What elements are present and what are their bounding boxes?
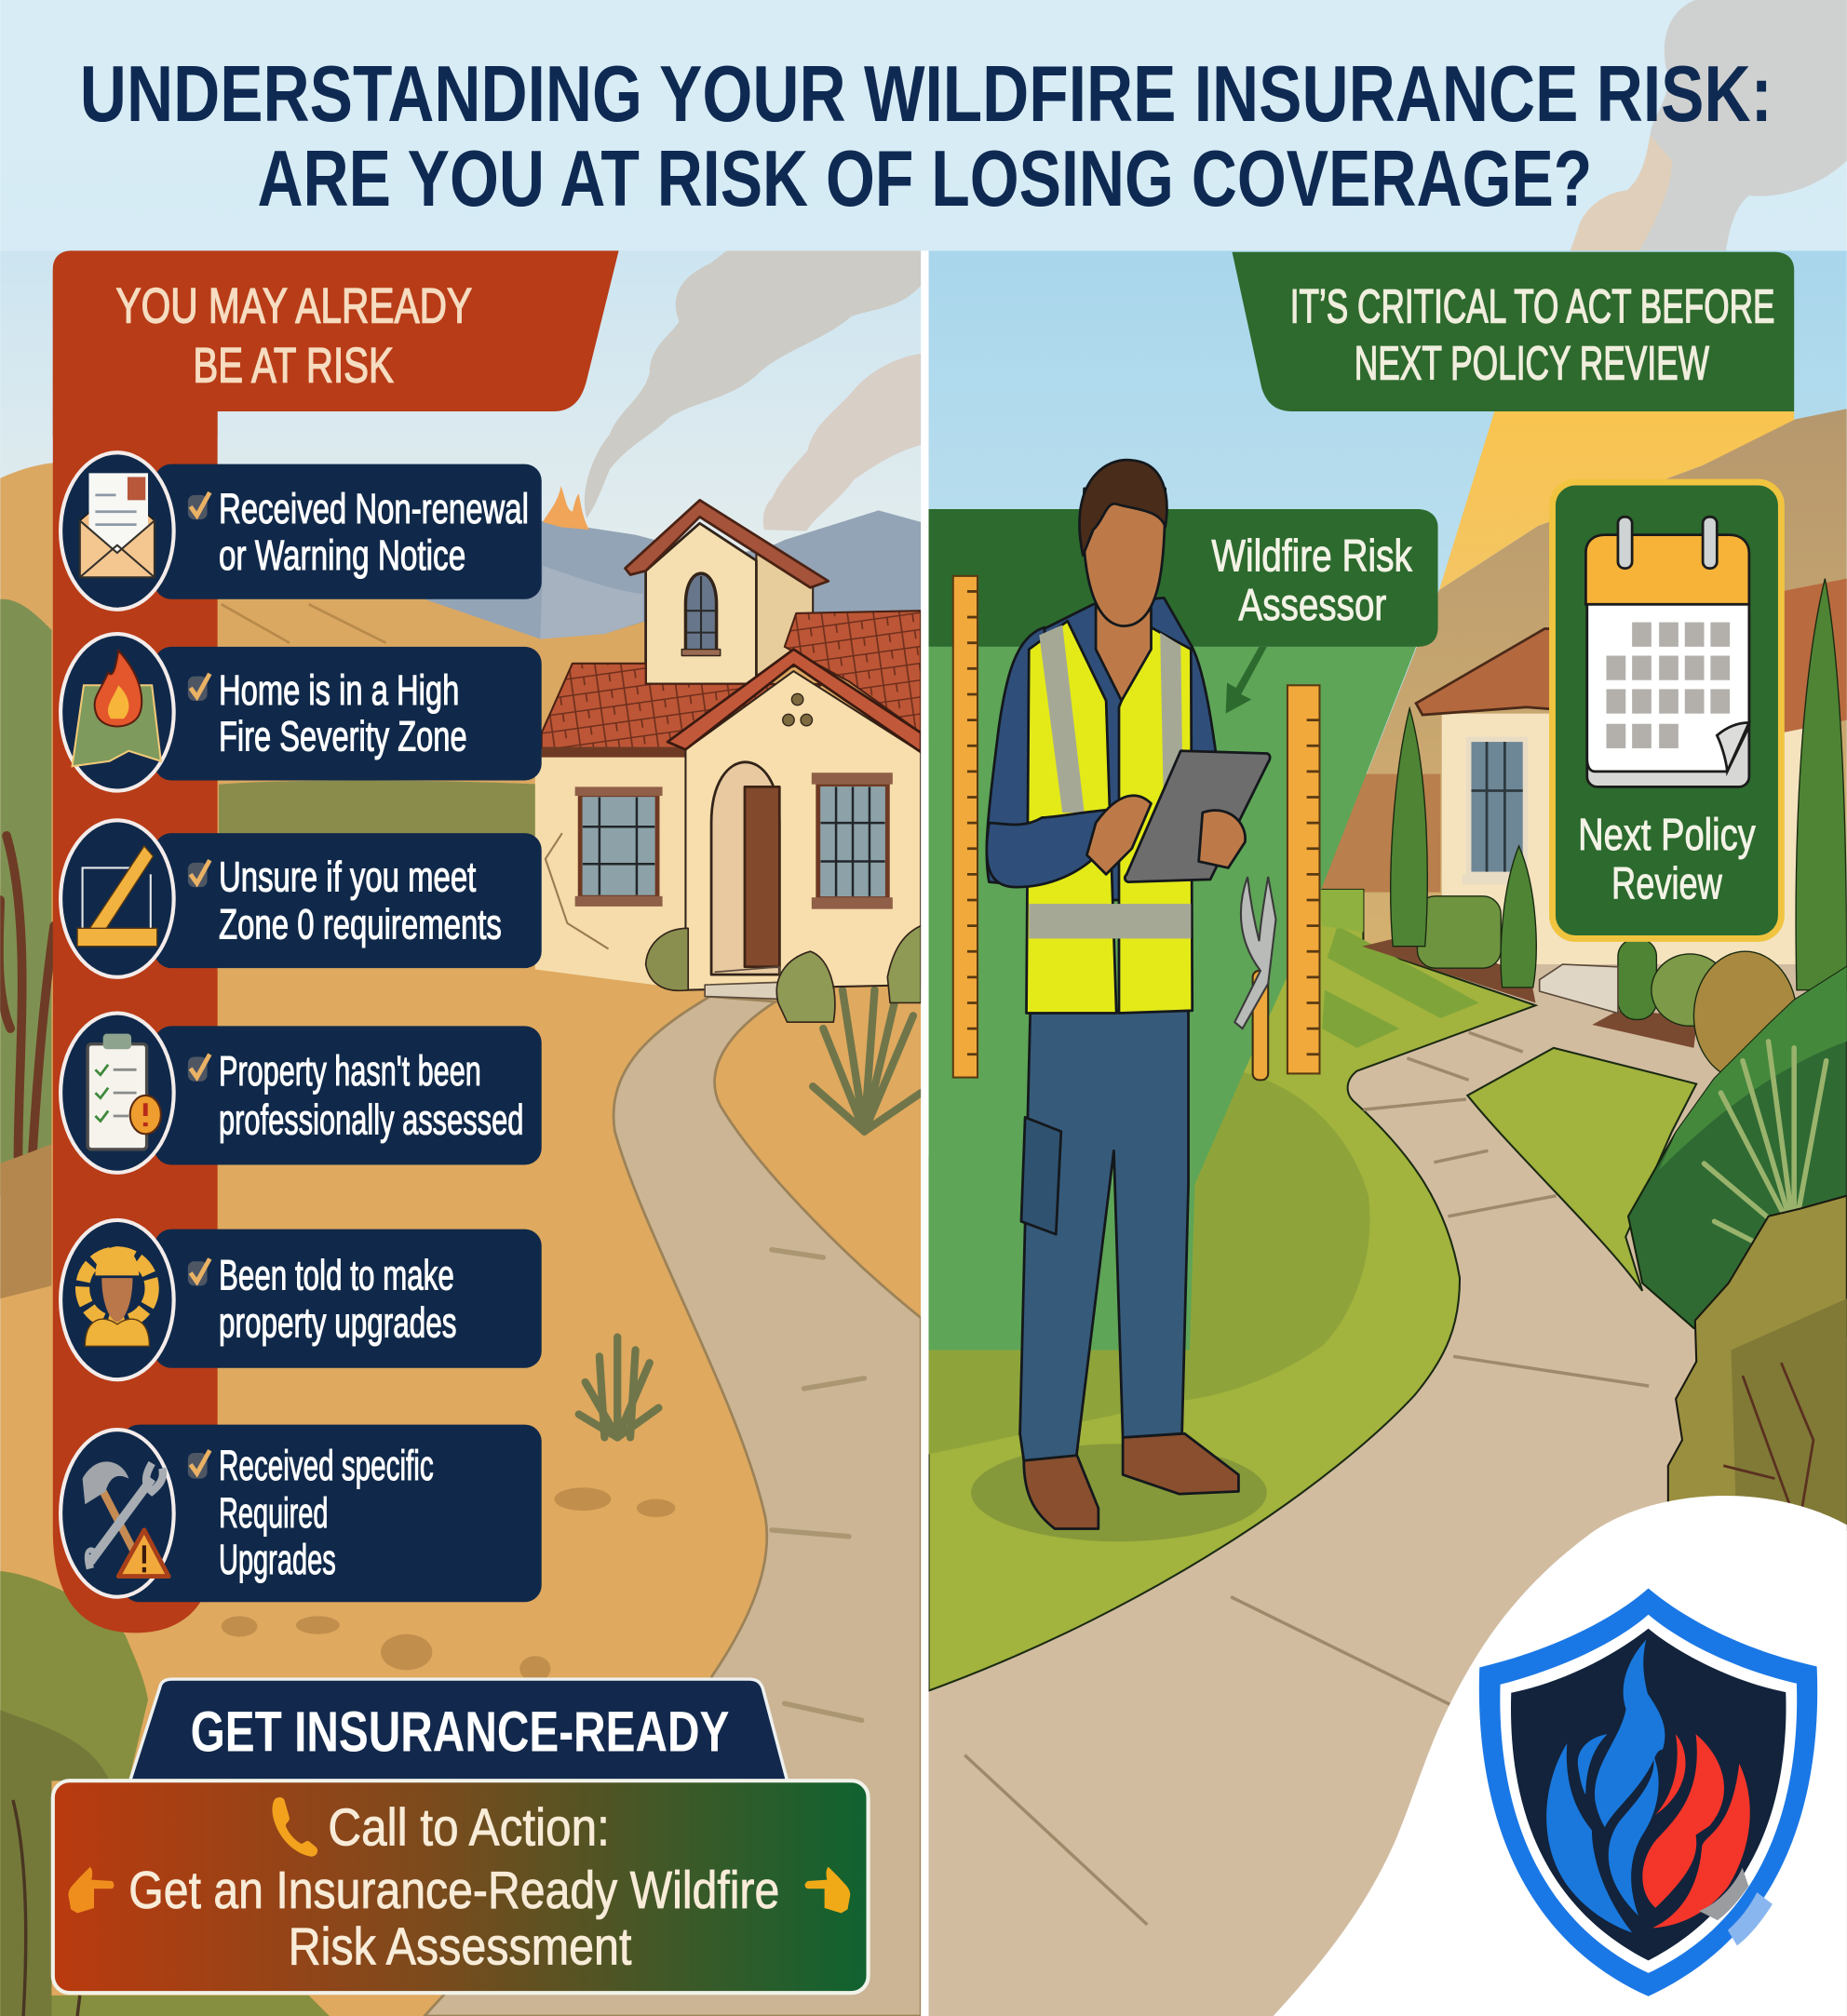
lawn stripes bbox=[1322, 926, 1479, 1048]
shrub left of door bbox=[646, 928, 688, 990]
left header text: BE AT RISK bbox=[193, 338, 394, 393]
neck bbox=[1096, 598, 1152, 701]
text bbox=[219, 1442, 434, 1583]
steps bbox=[1540, 964, 1618, 1014]
text: Zone 0 requirements bbox=[219, 900, 502, 948]
text bbox=[219, 1252, 457, 1347]
icon: pointing hand right bbox=[805, 1867, 850, 1913]
get insurance-ready banner bbox=[130, 1679, 788, 1781]
green bushes left bbox=[0, 599, 51, 1196]
checklist row 6 bbox=[61, 1425, 542, 1602]
shrub right of door bbox=[776, 951, 835, 1022]
grey watermark mark bbox=[1699, 1867, 1748, 1920]
brown hillside bbox=[1317, 409, 1847, 977]
trousers bbox=[1020, 1011, 1189, 1460]
icon: shield logo bbox=[1479, 1588, 1817, 1996]
mid bushes bbox=[219, 780, 535, 837]
wall crack bbox=[546, 833, 609, 948]
blue flames bbox=[1546, 1639, 1665, 1932]
pill bbox=[155, 464, 542, 599]
text: or Warning Notice bbox=[219, 531, 465, 579]
checklist row 2 bbox=[61, 634, 542, 791]
icon: clipboard checklist bbox=[61, 1014, 174, 1173]
pill bbox=[155, 833, 542, 968]
tower roof bbox=[626, 500, 829, 587]
text: Property hasn't been bbox=[219, 1047, 481, 1095]
shrub far right bbox=[887, 926, 921, 1002]
entry steps bbox=[705, 967, 779, 999]
panel: right green header bbox=[1233, 252, 1794, 411]
near forearm bbox=[987, 810, 1106, 887]
panel: right maintained property scene bbox=[929, 250, 1847, 2016]
upper right roof bbox=[785, 611, 921, 732]
pliers tool bbox=[1234, 877, 1275, 1080]
tablet bbox=[1125, 751, 1270, 882]
olive inner bbox=[1732, 1298, 1847, 1530]
dark green bush bbox=[1628, 967, 1847, 1337]
house bbox=[535, 500, 921, 1022]
bush highlight bbox=[1659, 967, 1847, 1170]
hedge bbox=[1417, 896, 1501, 968]
hand right bbox=[1199, 811, 1246, 867]
panel: left dry property scene bbox=[0, 250, 921, 2016]
pill bbox=[155, 647, 542, 780]
shield outer bbox=[1479, 1588, 1817, 1996]
panel text: Review bbox=[1611, 859, 1723, 909]
hand left bbox=[1086, 796, 1152, 874]
right header banner bbox=[1233, 252, 1794, 411]
central gable wall bbox=[685, 671, 921, 990]
right house window bbox=[1463, 739, 1525, 884]
agave plants bbox=[579, 977, 921, 1437]
upper lawn green bbox=[1317, 890, 1363, 932]
cta text bbox=[128, 1798, 779, 1977]
mid green zone bbox=[929, 647, 1416, 1350]
pill bbox=[122, 1425, 542, 1602]
check bbox=[188, 1055, 209, 1082]
text: Upgrades bbox=[219, 1536, 336, 1583]
fern bbox=[1704, 1042, 1827, 1247]
right ruler bbox=[1288, 685, 1319, 1073]
white corner with logo backdrop bbox=[1274, 1496, 1847, 2016]
checklist row 5 bbox=[61, 1220, 542, 1379]
arched entry bbox=[711, 762, 779, 974]
lawn ring bbox=[929, 1072, 1369, 1454]
bottom left bush bbox=[0, 1571, 330, 2016]
path cracks bbox=[772, 1250, 864, 1720]
shield white ring bbox=[1500, 1615, 1797, 1973]
left ruler bbox=[953, 576, 977, 1078]
text: Been told to make bbox=[219, 1252, 454, 1299]
mountain shade band bbox=[540, 566, 643, 639]
panel: left red header and band bbox=[53, 250, 619, 1633]
right extension wall bbox=[756, 553, 813, 675]
hair bbox=[1079, 460, 1166, 556]
mulch bed left bbox=[1362, 932, 1536, 1002]
smoke plume left small bbox=[763, 354, 921, 531]
banner text: GET INSURANCE-READY bbox=[191, 1700, 729, 1763]
left roof bbox=[542, 664, 823, 748]
cypress left bbox=[1391, 708, 1427, 947]
cypress tall bbox=[1796, 579, 1847, 990]
left sky bbox=[0, 251, 921, 551]
fence bbox=[1317, 774, 1440, 893]
icon: worker with gear bbox=[61, 1220, 174, 1379]
panel box bbox=[1552, 482, 1781, 938]
cargo pocket bbox=[1021, 1117, 1061, 1234]
cta text: Risk Assessment bbox=[289, 1918, 632, 1977]
olive bush bbox=[1668, 1196, 1847, 1530]
checklist row 4 bbox=[61, 1014, 542, 1173]
tan ground under paths bbox=[1287, 964, 1847, 2016]
left header banner bbox=[53, 250, 619, 437]
bush shade bbox=[0, 1710, 110, 2016]
label text: Wildfire Risk bbox=[1211, 531, 1413, 581]
right lawn patch bbox=[1467, 1048, 1696, 1291]
lawn bbox=[929, 890, 1536, 1691]
text: Required bbox=[219, 1489, 328, 1537]
icon: pointing hand left bbox=[68, 1867, 114, 1913]
left header text: YOU MAY ALREADY bbox=[115, 279, 472, 334]
label text bbox=[1211, 531, 1413, 630]
mulch bed right bbox=[1592, 1011, 1698, 1048]
check bbox=[188, 1258, 209, 1285]
red flames bbox=[1642, 1734, 1750, 1928]
panel text: Next Policy bbox=[1578, 810, 1756, 860]
walkway bbox=[425, 997, 921, 2016]
cypress near steps bbox=[1618, 938, 1656, 1019]
left wall bbox=[535, 758, 694, 990]
text: Fire Severity Zone bbox=[219, 713, 467, 760]
tower wall bbox=[646, 523, 756, 684]
center divider bbox=[921, 250, 929, 2016]
right house wall bbox=[1442, 714, 1808, 977]
vest right bbox=[1119, 627, 1193, 1014]
icon: phone bbox=[272, 1797, 317, 1857]
right header text bbox=[1290, 280, 1774, 390]
call to action box bbox=[53, 1781, 869, 1993]
flame on hill bbox=[543, 486, 589, 530]
right house roof bbox=[1416, 628, 1558, 715]
smoke plume left large bbox=[585, 250, 921, 518]
label panel bbox=[929, 509, 1438, 647]
far dry hill lower left bbox=[0, 1144, 51, 1298]
wall vents bbox=[783, 693, 813, 726]
right sky bbox=[929, 250, 1847, 765]
icon: flame over map bbox=[61, 634, 174, 791]
far mountain blue bbox=[425, 510, 921, 643]
icon: hammer wrench warning bbox=[61, 1430, 174, 1597]
text bbox=[219, 485, 529, 579]
text bbox=[219, 853, 502, 948]
branches bbox=[1723, 1363, 1813, 1517]
title bbox=[80, 49, 1773, 223]
vest left bbox=[1027, 621, 1116, 1014]
check bbox=[188, 674, 209, 701]
shirt torso and far arm bbox=[1042, 598, 1220, 900]
shrub by steps bbox=[1652, 954, 1729, 1026]
gable trim bbox=[667, 650, 921, 752]
smoke plume top right bbox=[1571, 0, 1847, 250]
box bbox=[53, 1781, 869, 1993]
vest stripes bbox=[1029, 625, 1191, 938]
icon: calendar bbox=[1585, 517, 1749, 786]
text: Home is in a High bbox=[219, 666, 459, 714]
checklist row 3 bbox=[61, 820, 542, 977]
ground stones bbox=[222, 1487, 676, 1677]
sand ground bbox=[0, 823, 921, 2016]
right window bbox=[812, 773, 893, 909]
label: wildfire risk assessor bbox=[929, 509, 1438, 714]
tan hills bbox=[0, 463, 921, 900]
checklist row 1 bbox=[61, 452, 542, 610]
banner shape bbox=[130, 1679, 788, 1781]
hill stripes bbox=[222, 604, 386, 643]
right roof far bbox=[1781, 579, 1847, 732]
bottom left bare branches bbox=[13, 1800, 80, 2016]
bare tree left bbox=[0, 836, 54, 1157]
left eave bbox=[542, 747, 688, 758]
left window bbox=[575, 786, 663, 907]
icon: rulers measuring bbox=[61, 820, 174, 977]
left header text bbox=[115, 279, 472, 393]
pill bbox=[155, 1230, 542, 1368]
door bbox=[745, 786, 779, 967]
ground shadow bbox=[971, 1444, 1267, 1541]
path joints bbox=[964, 1032, 1649, 1925]
text: Unsure if you meet bbox=[219, 853, 477, 900]
yellow glow wedge bbox=[1439, 411, 1794, 590]
arrow bbox=[1226, 647, 1267, 714]
icon: envelope with notice bbox=[61, 452, 174, 610]
panel text bbox=[1578, 810, 1756, 909]
text bbox=[219, 666, 467, 760]
text: Received specific bbox=[219, 1442, 434, 1489]
check bbox=[188, 860, 209, 887]
text: property upgrades bbox=[219, 1299, 457, 1347]
text bbox=[219, 1047, 523, 1143]
check bbox=[188, 1450, 209, 1479]
boots bbox=[1024, 1433, 1238, 1528]
tower window bbox=[681, 573, 721, 656]
check bbox=[188, 492, 209, 519]
pill bbox=[155, 1026, 542, 1165]
pale shield segment bbox=[1728, 1892, 1773, 1945]
cypress mid bbox=[1501, 846, 1536, 988]
text: Received Non-renewal bbox=[219, 485, 529, 532]
cta text: Call to Action: bbox=[328, 1798, 610, 1857]
orange bush bbox=[1693, 951, 1797, 1080]
cta text: Get an Insurance-Ready Wildfire bbox=[128, 1861, 779, 1920]
next policy review panel bbox=[1552, 482, 1781, 938]
wildfire risk assessor figure bbox=[987, 460, 1270, 1528]
near arm upper bbox=[987, 627, 1049, 887]
label text: Assessor bbox=[1238, 580, 1386, 630]
text: professionally assessed bbox=[219, 1095, 523, 1143]
shield dark core bbox=[1511, 1629, 1786, 1960]
red band bbox=[53, 270, 218, 1633]
face bbox=[1084, 489, 1166, 626]
